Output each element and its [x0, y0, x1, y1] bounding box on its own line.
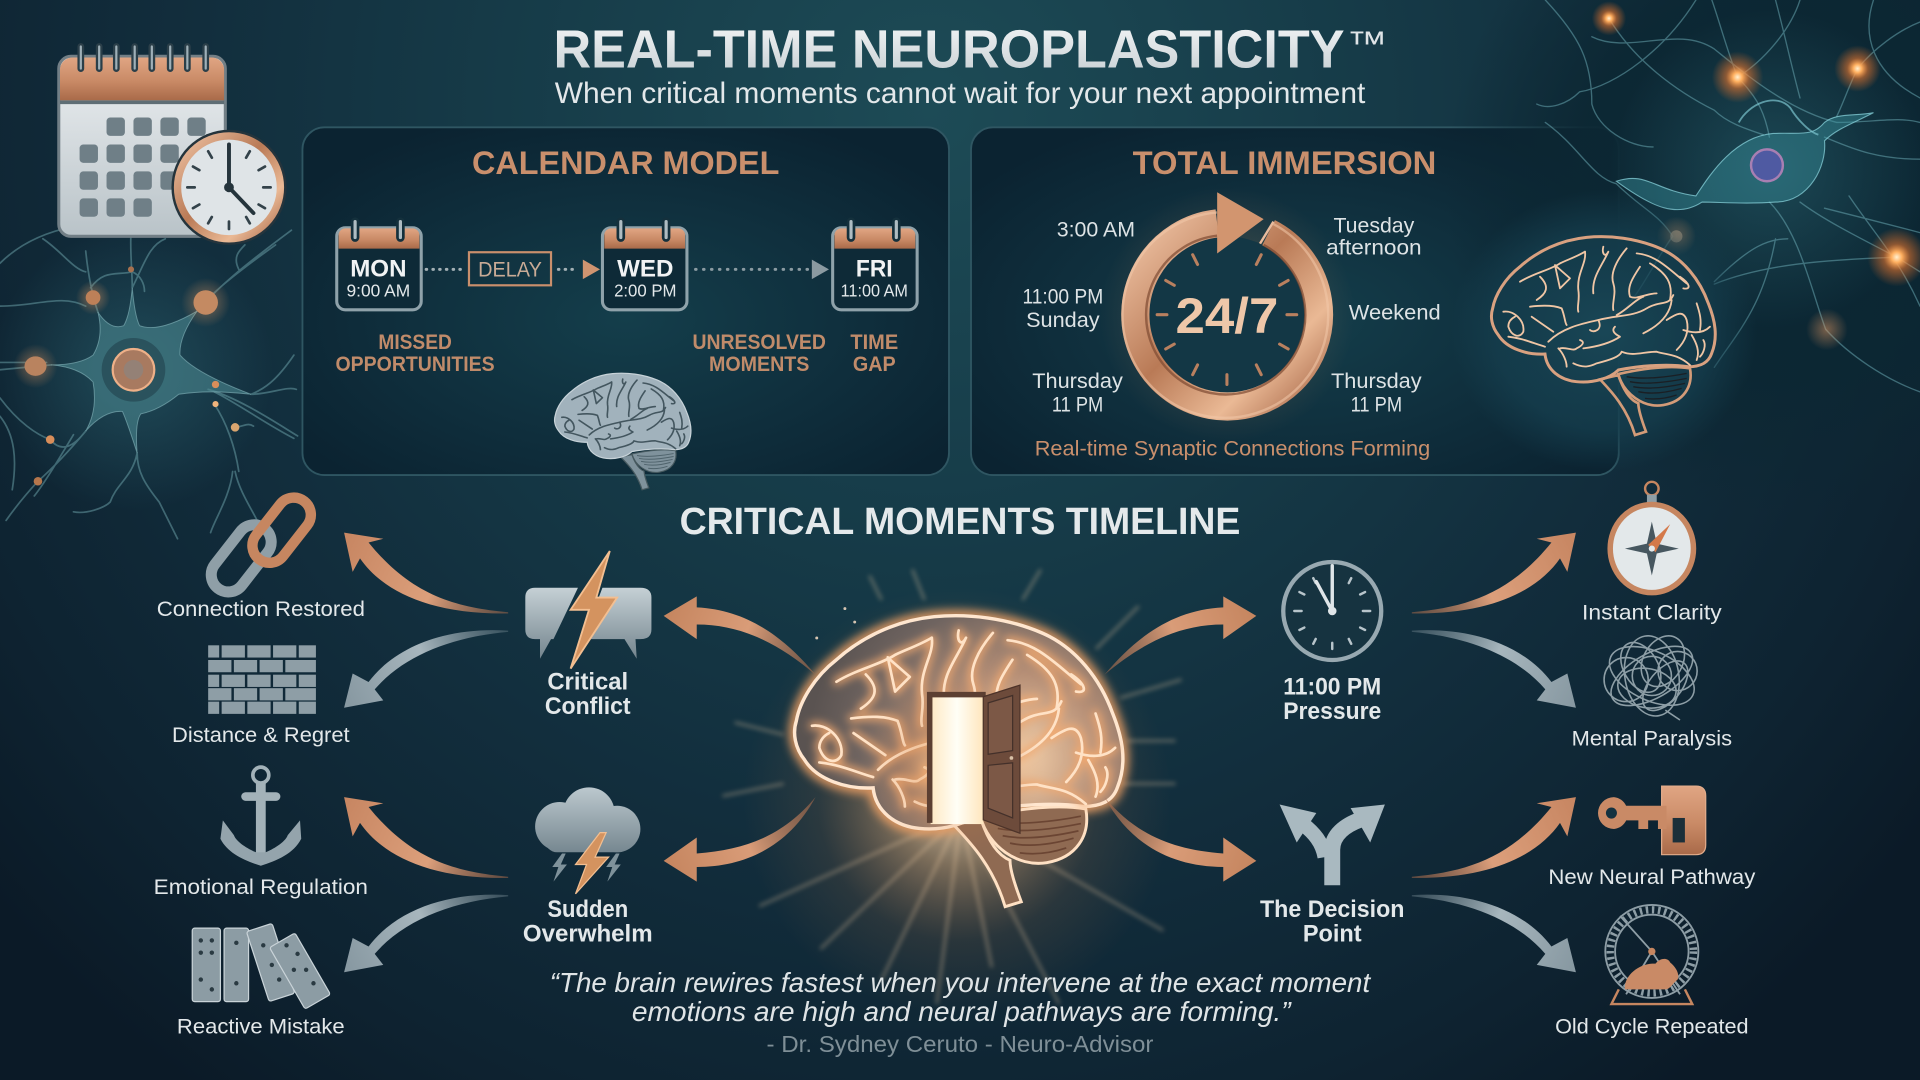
- label: unresolved moments: UNRESOLVED: [692, 331, 826, 354]
- heading: total immersion: TOTAL IMMERSION: [1133, 145, 1436, 181]
- time labels: 11 PM: [1052, 393, 1103, 416]
- calendar: Wednesday: [602, 222, 687, 310]
- outcome: distance and regret: [172, 645, 350, 747]
- node: sudden overwhelm: Overwhelm: [523, 921, 653, 948]
- arrow: brain to critical conflict: [664, 596, 816, 675]
- calendar: Wednesday: WED: [617, 256, 673, 283]
- calendar: Monday: MON: [350, 256, 407, 283]
- calendar: Monday: 9:00 AM: [347, 280, 410, 300]
- outcome: distance and regret: Distance & Regret: [172, 723, 350, 747]
- icon: wall calendar with clock: [59, 47, 287, 245]
- label: missed opportunities: OPPORTUNITIES: [336, 353, 495, 376]
- outcome: instant clarity: Instant Clarity: [1582, 601, 1722, 625]
- attribution: - Dr. Sydney Ceruto - Neuro-Advisor: [767, 1031, 1154, 1057]
- icon: clock: [171, 130, 287, 245]
- node: the decision point: The Decision: [1260, 896, 1404, 923]
- calendar: Friday: 11:00 AM: [841, 280, 908, 300]
- icon: copper brain: [1451, 190, 1757, 471]
- outcome: mental paralysis: Mental Paralysis: [1572, 727, 1732, 751]
- arrows: left outcomes: [344, 533, 508, 972]
- time labels: afternoon: [1326, 237, 1422, 260]
- arrow: brain to sudden overwhelm: [664, 797, 816, 882]
- label: time gap: TIME: [850, 331, 898, 354]
- node: the decision point: [1260, 804, 1404, 948]
- quote: “The brain rewires fastest when you intervene at the exact moment: [550, 967, 1371, 998]
- calendar: Friday: FRI: [856, 256, 893, 283]
- node: 11 PM pressure: Pressure: [1283, 698, 1381, 725]
- outcome: instant clarity: [1582, 482, 1722, 625]
- node: the decision point: Point: [1303, 921, 1362, 948]
- calendar: Monday: [337, 222, 421, 310]
- subtitle: When critical moments cannot wait for your next appointment: [555, 77, 1366, 110]
- outcome: emotional regulation: Emotional Regulation: [154, 875, 368, 899]
- chart: 24/7 cycle ring: 24/7: [1176, 288, 1278, 344]
- outcome: connection restored: Connection Restored: [157, 597, 365, 621]
- quote: emotions are high and neural pathways are forming.”: [632, 996, 1292, 1027]
- node: 11 PM pressure: 11:00 PM: [1283, 673, 1381, 700]
- arrow: brain to decision point: [1104, 797, 1256, 882]
- outcome: old cycle repeated: Old Cycle Repeated: [1555, 1014, 1749, 1038]
- outcome: emotional regulation: [154, 767, 368, 899]
- caption: synaptic connections: Real-time Synaptic Connections Forming: [1035, 437, 1430, 461]
- node: sudden overwhelm: Sudden: [547, 896, 628, 923]
- label: time gap: GAP: [853, 353, 896, 376]
- time labels: Thursday: [1331, 370, 1422, 393]
- node: sudden overwhelm: [523, 787, 653, 948]
- chart: 24/7 cycle ring: [1100, 187, 1354, 442]
- outcome: old cycle repeated: [1555, 905, 1749, 1038]
- time labels: Weekend: [1349, 302, 1441, 325]
- time labels: 11 PM: [1351, 393, 1402, 416]
- arrows: right outcomes: [1412, 533, 1576, 972]
- time labels: Sunday: [1026, 309, 1100, 332]
- time labels: 3:00 AM: [1057, 218, 1135, 241]
- outcome: reactive mistake: [177, 923, 345, 1038]
- time labels: Tuesday: [1333, 215, 1415, 238]
- central glowing brain with door: [722, 569, 1182, 1016]
- label: unresolved moments: [692, 331, 826, 376]
- node: critical conflict: [525, 551, 651, 720]
- label: missed opportunities: MISSED: [378, 331, 452, 354]
- outcome: connection restored: [157, 491, 365, 621]
- panel: calendar model: [302, 127, 949, 490]
- arrow: brain to 11 PM pressure: [1104, 596, 1256, 675]
- node: critical conflict: Critical: [547, 668, 628, 695]
- neuron illustration: left: [0, 227, 298, 539]
- neuron illustration: right: [1445, 0, 1920, 527]
- time labels: [1022, 215, 1441, 416]
- panel: total immersion: [971, 127, 1619, 475]
- title: REAL-TIME NEUROPLASTICITY: [553, 19, 1345, 79]
- outcome: new neural pathway: New Neural Pathway: [1548, 865, 1756, 889]
- label: unresolved moments: MOMENTS: [709, 353, 810, 376]
- outcome: new neural pathway: [1548, 786, 1756, 889]
- outcome: reactive mistake: Reactive Mistake: [177, 1014, 345, 1038]
- heading: critical moments timeline: CRITICAL MOMENTS TIMELINE: [680, 501, 1240, 543]
- calendar: Wednesday: 2:00 PM: [614, 280, 677, 300]
- time labels: 11:00 PM: [1022, 286, 1103, 309]
- title: ™: [1347, 25, 1387, 63]
- icon: grey brain: [555, 373, 691, 490]
- node: critical conflict: Conflict: [545, 693, 631, 720]
- heading: calendar model: CALENDAR MODEL: [472, 145, 779, 181]
- label: missed opportunities: [336, 331, 495, 376]
- door of light: [815, 607, 1043, 853]
- quote: [550, 967, 1371, 1027]
- label: time gap: [850, 331, 898, 376]
- time labels: Thursday: [1032, 370, 1123, 393]
- node: 11 PM pressure: [1283, 562, 1381, 725]
- outcome: mental paralysis: [1572, 628, 1732, 751]
- connector: delay: [426, 252, 600, 285]
- calendar: Friday: [833, 222, 917, 310]
- connector: delay: DELAY: [478, 259, 542, 282]
- connector: time gap: [696, 260, 829, 279]
